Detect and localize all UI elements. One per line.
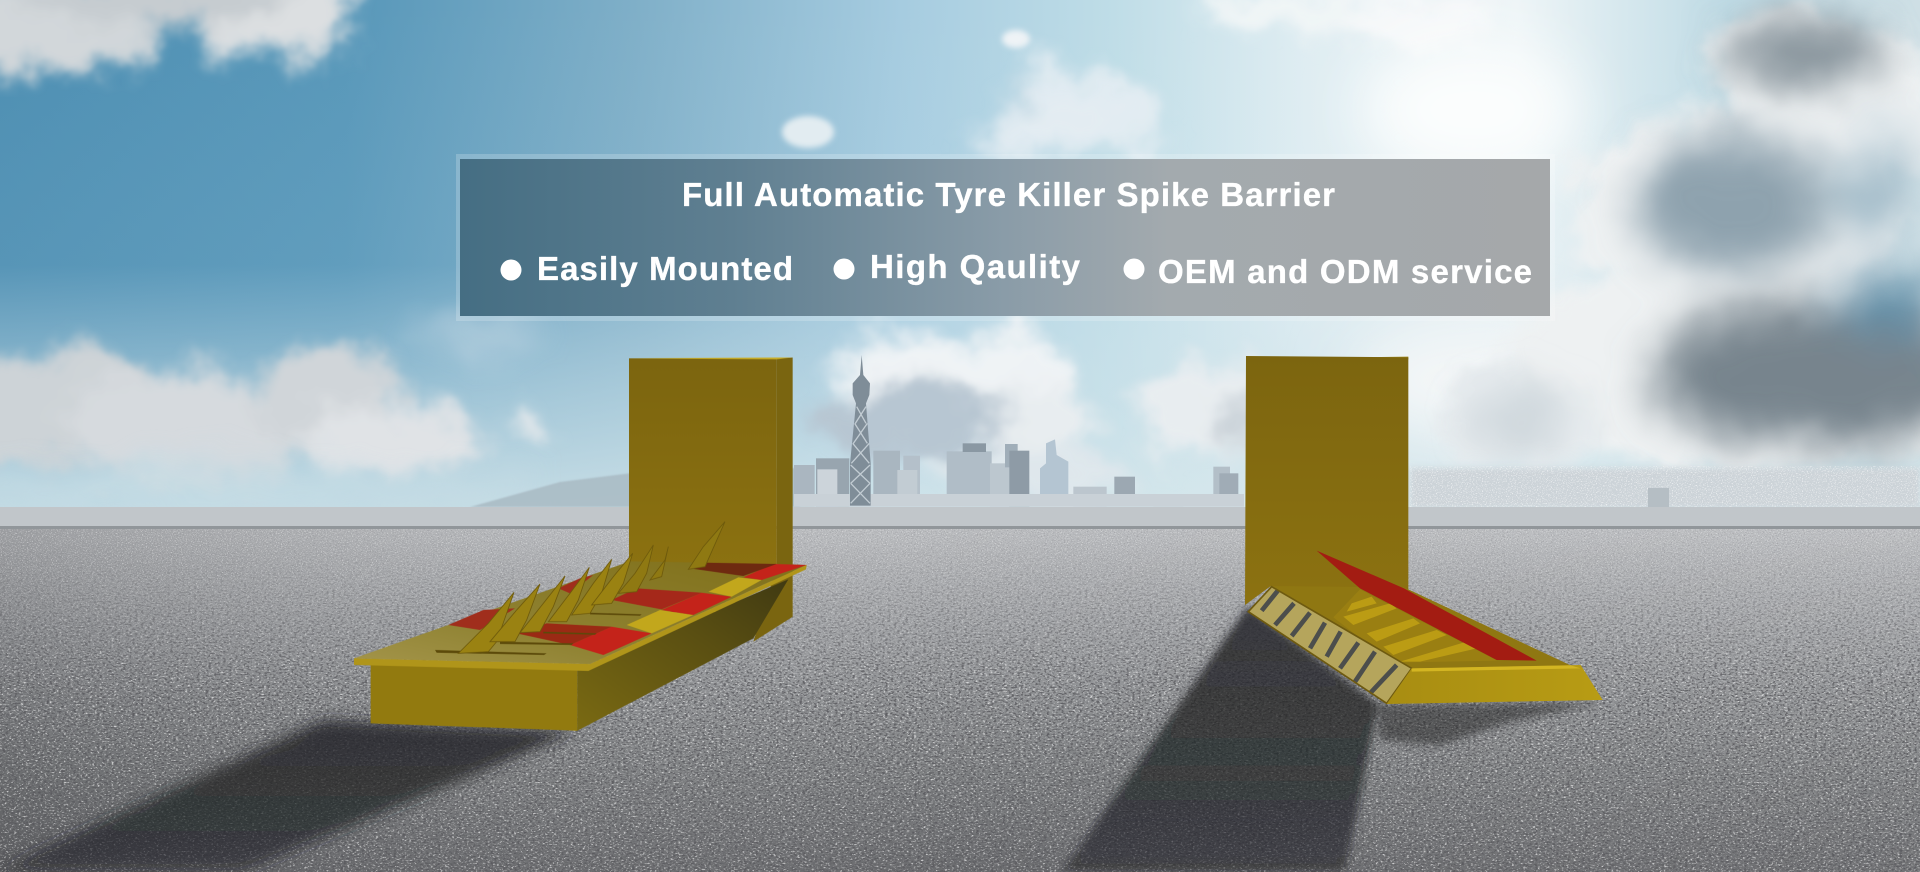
wall front bbox=[1245, 356, 1408, 605]
gravel texture: fine far band bbox=[0, 529, 1920, 678]
red and yellow stripes bbox=[570, 627, 652, 655]
front box top lip bbox=[1412, 665, 1581, 672]
base box side bbox=[577, 579, 788, 731]
feature: OEM and ODM service: OEM and ODM service bbox=[1158, 253, 1532, 290]
gravel texture: coarse near band bbox=[0, 529, 1920, 872]
spikes bbox=[458, 522, 725, 653]
translucent banner panel bbox=[456, 154, 1555, 321]
skyline: far right building bbox=[1648, 488, 1669, 507]
right barrier: lowered spikes bbox=[1245, 356, 1603, 704]
spike slots bbox=[435, 613, 642, 655]
distant horizon haze and city bbox=[470, 355, 1920, 508]
cloud: behind skyline bbox=[805, 334, 1280, 496]
lowered spike teeth bbox=[1333, 589, 1497, 663]
dark red shaded stripes bbox=[517, 623, 612, 645]
front box bbox=[1387, 665, 1603, 704]
base box front bbox=[371, 665, 577, 731]
cloud: wisps above left horizon bbox=[0, 321, 550, 512]
horizon: left hill bbox=[470, 468, 800, 507]
ground shadow: left barrier bbox=[0, 720, 577, 872]
cloud: left horizon bbox=[0, 345, 552, 480]
cloud: right bank, white mass bbox=[1440, 12, 1920, 470]
cloud: small centre puffs bbox=[782, 30, 1030, 148]
feature: high quality: High Qaulity bbox=[870, 248, 1081, 285]
heading: Full Automatic Tyre Killer Spike Barrier bbox=[682, 176, 1335, 213]
wall flange bbox=[1246, 356, 1408, 360]
plate edge bbox=[354, 565, 807, 671]
cloud: top left bbox=[0, 0, 360, 75]
red face bbox=[1317, 551, 1537, 661]
recess floor bbox=[1270, 586, 1571, 669]
skyline: tower bbox=[850, 355, 871, 506]
plate top bbox=[354, 561, 807, 664]
cloud: right bank, grey shaded bodies bbox=[1475, 20, 1920, 447]
left barrier: raised spikes bbox=[354, 357, 807, 731]
wall top edge bbox=[629, 357, 793, 359]
sky bbox=[0, 0, 1920, 530]
wall side bbox=[753, 357, 793, 642]
wall front bbox=[629, 358, 777, 573]
asphalt ground bbox=[0, 529, 1920, 872]
horizon: right city plain bbox=[1410, 466, 1920, 508]
cloud: upper centre bbox=[960, 0, 1500, 150]
ground shadow: right barrier bbox=[1062, 606, 1600, 872]
feature: easily mounted: Easily Mounted bbox=[537, 250, 793, 287]
clouds bbox=[0, 0, 1920, 512]
skyline: city buildings bbox=[794, 355, 1244, 507]
striped ramp bbox=[1248, 587, 1412, 703]
parapet wall bbox=[0, 507, 1920, 529]
cloud: sun glow bbox=[1350, 40, 1610, 440]
